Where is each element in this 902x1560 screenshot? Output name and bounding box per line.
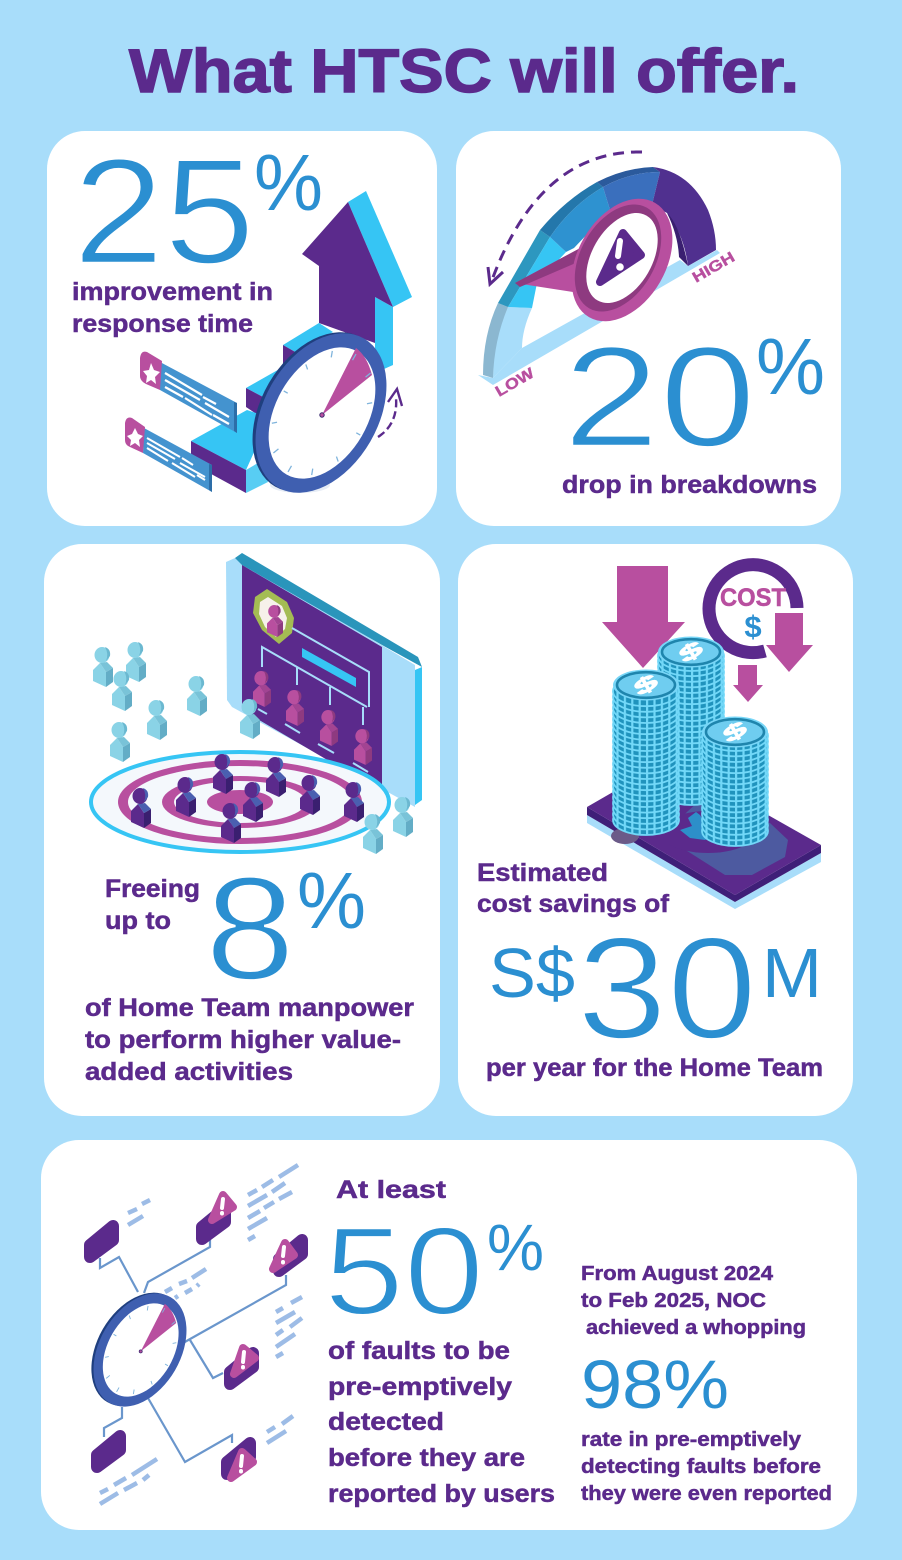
panel: cost savings [458,544,853,1116]
text: freeing up to: up to [105,907,171,935]
stat: S$30M [489,907,822,1069]
text: drop in breakdowns: drop in breakdowns [562,471,817,499]
icon: cost down arrow [766,613,813,672]
text: of Home Team manpower: added activities [85,1058,293,1086]
label: LOW: LOW [492,364,538,400]
text: faults detected: of faults to be [328,1337,510,1365]
text: faults detected: pre-emptively [328,1373,512,1401]
text: from august 2024 [581,1263,806,1339]
icon: people on target [131,754,364,843]
text: rate in pre-emptively detecting: detecting faults before [581,1456,821,1478]
text: per year for the Home Team: per year for the Home Team [486,1054,823,1082]
stat: 50%: % [487,1210,544,1284]
icon: card one [140,352,237,433]
stat: 98%: 98% [581,1346,729,1423]
stat: S$30M: S$ [489,934,575,1012]
text: estimated cost savings of: Estimated [477,859,608,887]
stat: 50% [324,1202,544,1341]
stat: S$30M: M [762,934,822,1012]
stat: 25%: % [254,138,323,227]
icon: warning pointer [515,181,693,339]
icon: dashed data lines [100,1165,302,1504]
stat: 25%: 25 [73,127,255,295]
icon: dashed direction arrow [488,152,642,284]
icon: banknote [587,792,821,909]
icon: target rings [91,752,389,852]
label: HIGH: HIGH [690,249,738,286]
text: improvement in response time: response time [72,310,253,338]
text: estimated cost savings of [477,859,670,918]
text: of Home Team manpower: of Home Team manpower [85,994,414,1022]
icon: large down arrow [602,566,685,668]
text: from august 2024: achieved a whopping [586,1317,806,1339]
icon: warning triangles [212,1195,294,1478]
text: rate in pre-emptively detecting: rate in pre-emptively [581,1429,802,1451]
text: from august 2024: to Feb 2025, NOC [581,1290,766,1312]
stat: 20%: % [756,322,825,411]
text: rate in pre-emptively detecting [581,1429,832,1505]
icon: people waiting [93,642,413,854]
panel: manpower [44,544,440,1116]
text: estimated cost savings of: cost savings of [477,890,670,918]
text: faults detected: detected [328,1408,444,1436]
icon: small clock [72,1276,206,1423]
icon: small down arrow [733,665,763,702]
text: at least: At least [336,1176,447,1204]
icon: cost dial [709,565,797,653]
text: of Home Team manpower [85,994,414,1086]
icon: connector lines [100,1238,286,1462]
icon: org chart board [226,553,422,807]
icon: dashed rotate arrow [378,389,402,437]
icon: clock [226,309,413,516]
panel: fault detection [41,1140,857,1530]
text: faults detected [328,1337,555,1508]
text: faults detected: before they are [328,1444,525,1472]
title: What HTSC will offer. [129,37,799,105]
text: improvement in response time [72,278,273,338]
stat: 8%: % [297,856,366,945]
icon: cost dial: COST [720,584,786,612]
stat: 8% [205,847,366,1011]
stat: 20% [563,318,825,477]
stat: 20%: 20 [563,318,756,477]
panel: response time [47,127,437,526]
text: freeing up to [105,875,200,935]
icon: node boxes [90,1208,302,1474]
icon: rising arrow steps [191,191,412,493]
panel: breakdowns [456,131,841,526]
text: freeing up to: Freeing [105,875,200,903]
stat: 8%: 8 [205,847,295,1011]
text: improvement in response time: improvement in [72,278,273,306]
stat: 25% [73,127,323,295]
text: rate in pre-emptively detecting: they were even reported [581,1483,832,1505]
icon: card two [125,418,212,492]
text: faults detected: reported by users [328,1480,555,1508]
text: from august 2024: From August 2024 [581,1263,774,1285]
icon: coin stacks [613,636,768,846]
stat: 50%: 50 [324,1202,484,1341]
chart: risk gauge [478,167,738,400]
icon: cost dial: $ [744,609,762,644]
text: of Home Team manpower: to perform higher value- [85,1026,401,1054]
stat: S$30M: 30 [577,907,757,1069]
